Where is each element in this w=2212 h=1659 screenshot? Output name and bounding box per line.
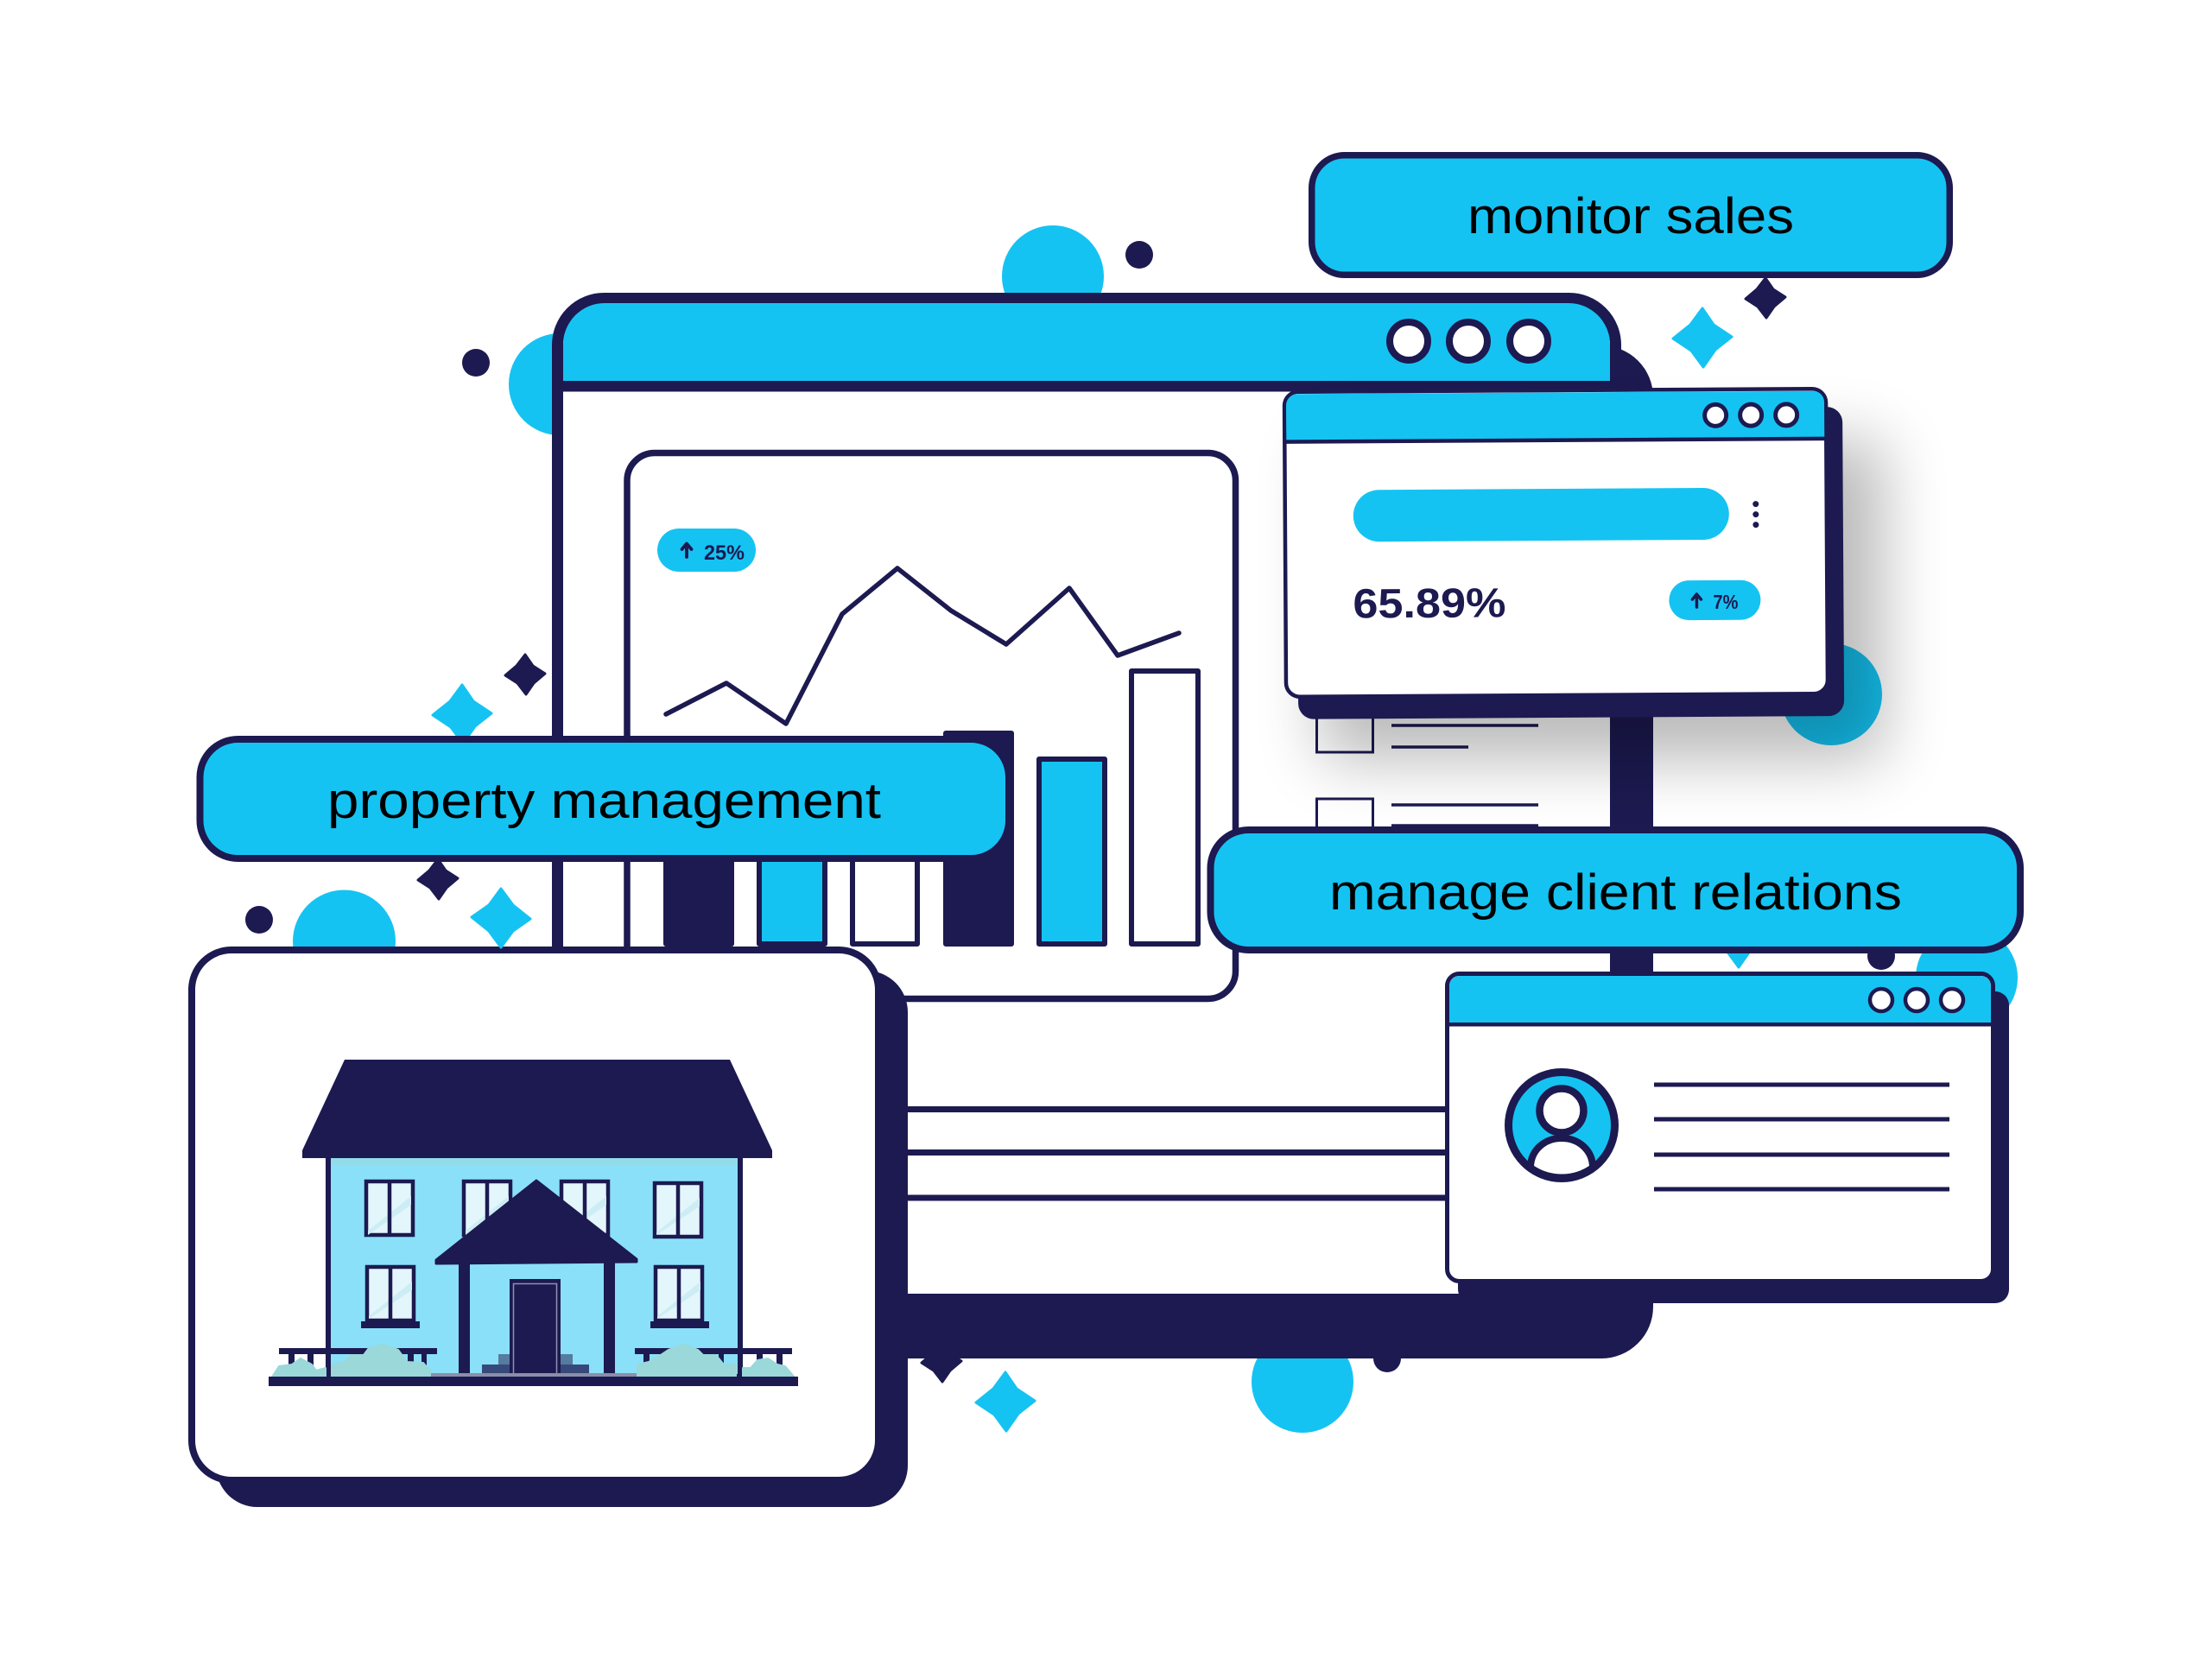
- popup navy offset: [1296, 407, 1844, 719]
- panel: sales popup: [1284, 389, 1844, 719]
- porch columns: [459, 1261, 470, 1377]
- window control dots: [1390, 322, 1548, 360]
- panel: chart: [627, 453, 1235, 998]
- house wall: [328, 1158, 740, 1377]
- ground: [269, 1377, 798, 1386]
- badge: 7%: 7%: [1713, 591, 1738, 613]
- list rows under popup: [908, 691, 1538, 1198]
- popup progress pill: [1353, 488, 1729, 541]
- door: [510, 1279, 561, 1377]
- fence and ground: [279, 1348, 792, 1377]
- label: manage client relations: manage client relations: [1329, 864, 1902, 921]
- label: monitor sales: monitor sales: [1467, 188, 1794, 244]
- client title bar: [1449, 976, 1991, 1023]
- label: property management: property management: [327, 773, 881, 829]
- label: manage client relations: [1211, 830, 2020, 950]
- label: monitor sales: [1312, 155, 1949, 275]
- badge: 25%: [657, 529, 756, 572]
- porch roof: [436, 1181, 637, 1263]
- main window frame: [558, 299, 1615, 1299]
- popup value: 65.89%: [1353, 580, 1506, 627]
- popup title bar: [1286, 391, 1824, 441]
- client control dots: [1870, 989, 1963, 1011]
- bar chart: [666, 671, 1198, 944]
- main window shadow: [605, 345, 1653, 1358]
- upper and lower windows: [361, 1181, 709, 1328]
- icon: house: [269, 1060, 798, 1386]
- porch steps: [498, 1354, 573, 1365]
- sparkle over house card: [472, 889, 530, 947]
- client detail lines: [1654, 1085, 1949, 1189]
- client window frame: [1448, 974, 1993, 1282]
- background sparkles: [418, 278, 1785, 1431]
- badge: 25%: 25%: [704, 541, 745, 565]
- label: property management: [200, 739, 1009, 858]
- popup drop shadow: [1321, 440, 1883, 760]
- icon: avatar: [1508, 1072, 1615, 1179]
- popup title divider: [1284, 437, 1826, 444]
- house card frame: [192, 950, 878, 1480]
- house card shadow: [216, 971, 908, 1507]
- line chart: [666, 568, 1179, 724]
- client title divider: [1447, 1023, 1993, 1026]
- house roof: [302, 1060, 772, 1158]
- panel: client profile window: [1447, 974, 2009, 1303]
- panel: house card: [192, 950, 908, 1507]
- popup control dots: [1705, 404, 1797, 426]
- main browser window: [557, 299, 1653, 1358]
- main window title bar: [563, 303, 1610, 381]
- badge: 7%: [1669, 580, 1761, 620]
- bushes: [271, 1345, 795, 1378]
- client window shadow: [1458, 991, 2009, 1303]
- title bar divider: [557, 381, 1615, 392]
- popup frame: [1284, 389, 1828, 697]
- background circles and dots: [245, 225, 2018, 1433]
- popup menu dots: [1752, 501, 1759, 528]
